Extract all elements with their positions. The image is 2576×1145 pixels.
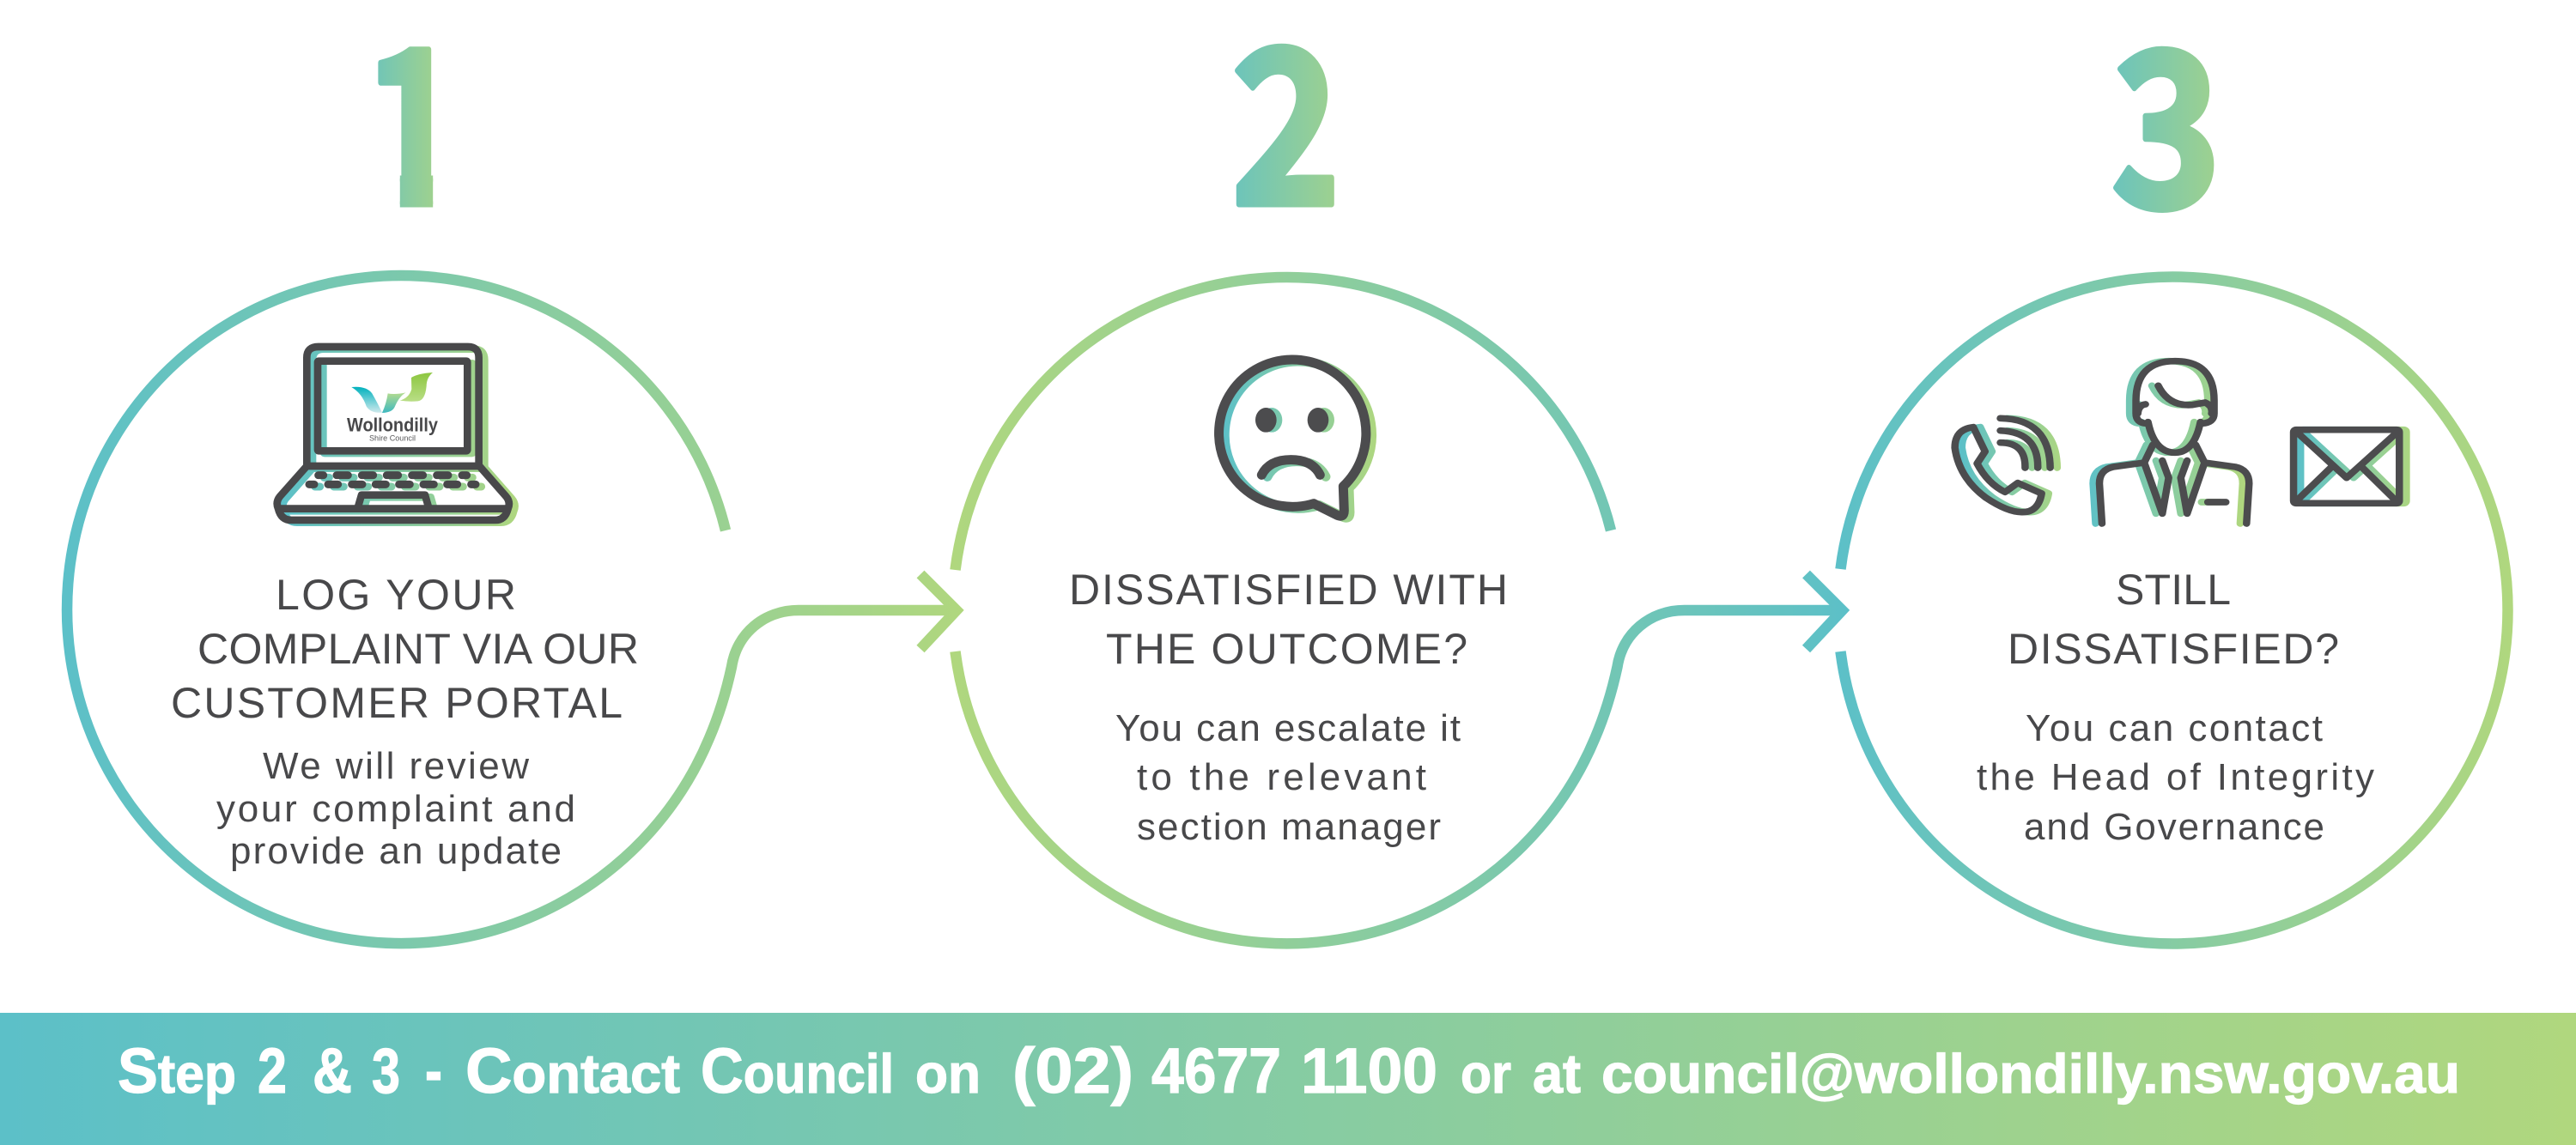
banner text: Step: [118, 1035, 236, 1106]
banner text: or: [1461, 1043, 1511, 1105]
body text: step 3: [1977, 707, 2374, 848]
heading: step 2: DISSATISFIED WITH: [1069, 566, 1508, 614]
body text: step 3: the Head of Integrity: [1977, 756, 2374, 798]
banner text: &: [313, 1035, 352, 1106]
heading: step 1: LOG YOUR: [276, 571, 516, 619]
panel: step 2 circle and arrow: [955, 277, 1844, 943]
banner text: 2: [258, 1035, 287, 1106]
heading: step 2: [1069, 566, 1508, 673]
icon: sad face speech bubble: [1219, 360, 1372, 518]
panel: step 3 circle: [1841, 276, 2508, 944]
body text: step 2: [1115, 707, 1461, 848]
panel: step 1 circle and arrow: [67, 276, 958, 943]
icon: telephone: [1955, 418, 2057, 512]
banner text: Contact: [465, 1035, 680, 1106]
banner text: 4677: [1151, 1035, 1281, 1106]
banner text: (02): [1012, 1035, 1133, 1106]
heading: step 1: CUSTOMER PORTAL: [171, 679, 623, 727]
body text: step 3: You can contact: [2026, 707, 2323, 749]
banner text: on: [915, 1043, 981, 1105]
heading: step 1: [171, 571, 639, 727]
body text: step 2: You can escalate it: [1115, 707, 1461, 749]
body text: step 2: section manager: [1137, 806, 1441, 848]
banner text: [118, 1035, 2460, 1106]
body text: step 1: [216, 745, 575, 872]
body text: step 2: to the relevant: [1137, 756, 1426, 798]
banner text: 1100: [1301, 1035, 1437, 1106]
icon: laptop with council logo: [277, 347, 515, 523]
banner text: council@wollondilly.nsw.gov.au: [1601, 1043, 2460, 1105]
banner text: Council: [701, 1035, 894, 1106]
body text: step 1: We will review: [263, 745, 529, 787]
logo subtitle: Shire Council: [369, 433, 416, 442]
heading: step 1: COMPLAINT VIA OUR: [197, 625, 639, 673]
icon: council officer: [2093, 361, 2249, 524]
heading: step 3: [2008, 566, 2339, 673]
body text: step 1: provide an update: [230, 830, 562, 872]
heading: step 2: THE OUTCOME?: [1106, 625, 1467, 673]
body text: step 3: and Governance: [2024, 806, 2324, 848]
banner text: 3: [372, 1035, 400, 1106]
body text: step 1: your complaint and: [216, 788, 575, 830]
icon: envelope: [2293, 430, 2406, 503]
logo ribbon: [351, 373, 433, 413]
heading: step 3: DISSATISFIED?: [2008, 625, 2339, 673]
contact banner: [0, 1013, 2576, 1145]
logo wordmark: Wollondilly: [347, 415, 439, 436]
heading: step 3: STILL: [2116, 566, 2231, 614]
banner text: -: [425, 1035, 442, 1106]
banner text: at: [1533, 1043, 1581, 1105]
